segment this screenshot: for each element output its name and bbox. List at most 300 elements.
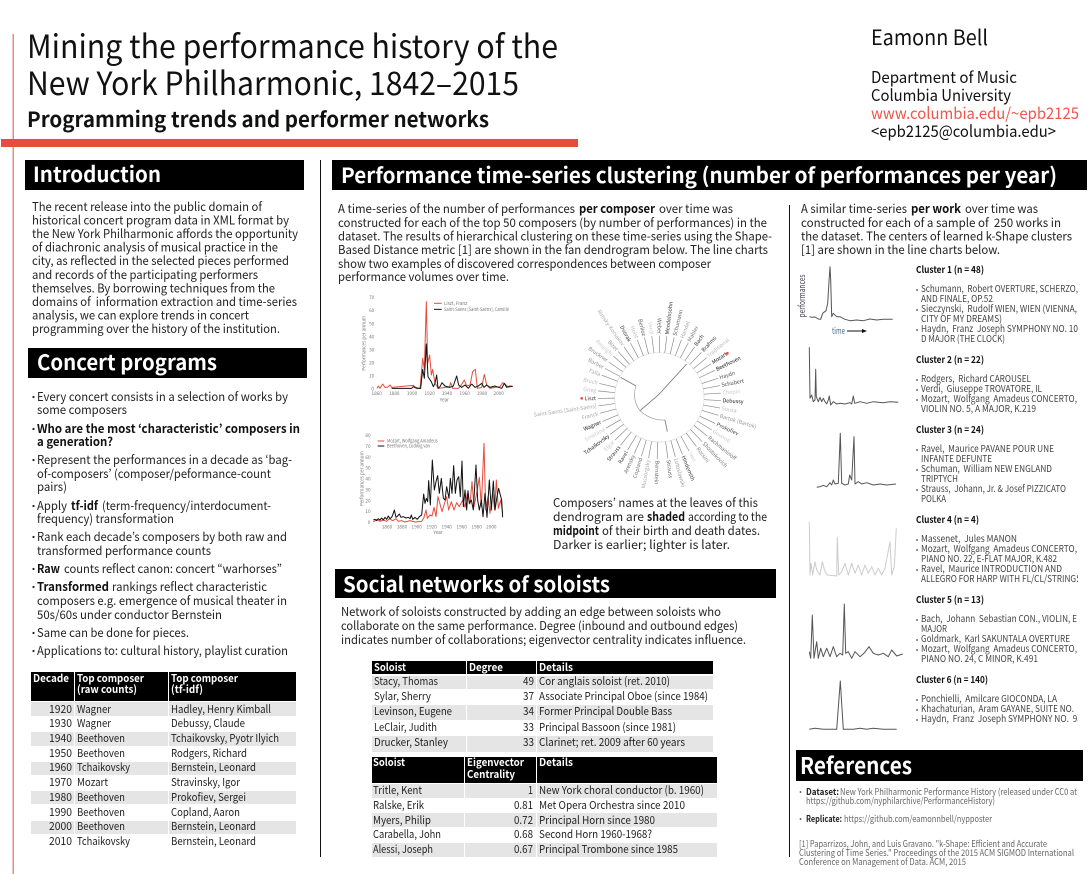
text: replicate: Replicate:: [806, 812, 842, 825]
text: cluster 1 works: Cluster 1 (n = 48): [916, 262, 984, 276]
chart: fan dendrogram of composers: Bizet: [606, 338, 620, 353]
chart: Liszt and Saint-Saens line chart: Performances per annum: [361, 316, 368, 371]
text: concert programs bullets: (term-frequency/interdocument-: [102, 497, 271, 514]
chart: fan dendrogram of composers: Prokofiev: [715, 420, 740, 438]
chart: Liszt and Saint-Saens line chart: [361, 295, 513, 404]
red horizontal rule: [1, 139, 578, 147]
sparkline: cluster 2 centroid: [809, 347, 898, 405]
text: cluster 4 works: Massenet, Jules MANON: [921, 531, 1017, 545]
chart: Liszt and Saint-Saens line chart: 10: [369, 373, 375, 379]
chart: Liszt and Saint-Saens line chart: 20: [369, 360, 375, 366]
title: [27, 22, 558, 105]
table: soloists by degree: 49: [523, 673, 534, 689]
text: concert programs bullets: a generation?: [37, 433, 113, 450]
chart: fan dendrogram of composers: Elgar: [602, 438, 617, 453]
table: top composers by decade: Wagner: [77, 701, 112, 717]
text: per work description: A similar time-series: [801, 200, 907, 217]
table: soloists by eigenvector centrality: Details: [539, 755, 573, 770]
text: cluster 4 works: PIANO NO. 22, E-FLAT MAJOR, K.482: [921, 551, 1057, 565]
author block: Department of Music: [871, 64, 1017, 88]
chart: fan dendrogram of composers: Falla: [588, 366, 602, 378]
red vertical rule: [12, 34, 14, 874]
table: top composers by decade: Decade: [33, 671, 69, 686]
chart: fan dendrogram of composers: Franck: [581, 410, 599, 422]
text: per work description: constructed for each of a sample of 250 works in: [801, 214, 1061, 231]
panel: references: [796, 747, 1083, 868]
chart: Mozart and Beethoven line chart: Year: [432, 530, 443, 536]
text: introduction body: [32, 198, 299, 337]
heading: social networks: [335, 569, 776, 599]
chart: Liszt and Saint-Saens line chart: 40: [369, 334, 375, 340]
text: network description: Network of soloists constructed by adding an edge between soloists who: [341, 603, 721, 620]
text: per work description: over time was: [965, 200, 1038, 217]
text: cluster 3 works: Cluster 3 (n = 24): [916, 422, 984, 436]
text: cluster 5 works: [916, 592, 1077, 665]
table: soloists by degree: Cor anglais soloist (ret. 2010): [539, 673, 670, 689]
text: concert programs bullets: counts reflect canon: concert “warhorses”: [64, 560, 282, 577]
table: soloists by eigenvector centrality: Met Opera Orchestra since 2010: [539, 797, 685, 813]
text: per composer description: A time-series of the number of performances: [338, 200, 575, 217]
axis label: performances: performances: [795, 274, 808, 318]
column divider left: [320, 160, 321, 857]
chart: fan dendrogram of composers: Grieg: [583, 385, 597, 394]
text: per composer description: per composer: [579, 200, 656, 217]
table: top composers by decade: 1990: [49, 804, 72, 820]
table: soloists by eigenvector centrality: Myers, Philip: [373, 812, 431, 828]
text: cluster 2 works: [916, 352, 1077, 415]
chart: fan dendrogram of composers: Traditional: [705, 336, 731, 359]
chart: fan dendrogram of composers: Tchaikovsky: [582, 432, 611, 457]
chart: fan dendrogram of composers: Haydn: [718, 369, 736, 381]
chart: fan dendrogram of composers: Shostakovich: [701, 440, 729, 469]
table: top composers by decade: (raw counts): [77, 682, 137, 697]
chart: fan dendrogram of composers: Berlioz: [636, 318, 648, 337]
chart: Liszt and Saint-Saens line chart: Liszt, Franz: [444, 300, 468, 307]
table: top composers by decade: Debussy, Claude: [171, 715, 245, 731]
text: cluster 4 works: [916, 512, 1081, 585]
table: top composers by decade: Bernstein, Leonard: [171, 759, 256, 775]
text: cluster 2 works: Cluster 2 (n = 22): [916, 352, 984, 366]
text: per composer description: show two examples of discovered correspondences between composer: [338, 255, 711, 272]
chart: Liszt and Saint-Saens line chart: 0: [371, 387, 374, 393]
dendrogram caption: shaded: [647, 508, 685, 525]
table: soloists by degree: Sylar, Sherry: [374, 688, 431, 704]
table: top composers by decade: Beethoven: [77, 730, 125, 746]
table: soloists by degree: Clarinet; ret. 2009 after 60 years: [539, 734, 685, 750]
text: introduction body: historical concert program data in XML format by: [32, 212, 290, 228]
table: top composers by decade: Beethoven: [77, 818, 125, 834]
chart: fan dendrogram of composers: Mendelssohn: [663, 301, 675, 335]
table: top composers by decade: Prokofiev, Sergei: [171, 789, 246, 805]
chart: fan dendrogram of composers: Mahler: [685, 323, 701, 343]
heading: social networks: Social networks of soloists: [343, 569, 610, 599]
text: dataset: [800, 785, 1078, 807]
text: cluster 1 works: CITY OF MY DREAMS): [921, 311, 1002, 325]
chart: fan dendrogram of composers: Debussy: [722, 396, 744, 405]
heading: introduction: Introduction: [33, 159, 161, 189]
chart: fan dendrogram of composers: Mozart: [710, 350, 729, 366]
table: soloists by degree: Soloist: [374, 660, 407, 675]
text: concert programs bullets: 50s/60s under conductor Bernstein: [37, 606, 222, 623]
text: network description: [341, 603, 746, 648]
text: concert programs bullets: frequency) transformation: [37, 510, 174, 527]
chart: fan dendrogram of composers: Smetana: [583, 425, 606, 443]
table: soloists by eigenvector centrality: 0.68: [514, 826, 533, 842]
dendrogram caption: [553, 494, 767, 553]
chart: fan dendrogram of composers: Brahms: [699, 334, 719, 354]
chart: fan dendrogram of composers: Ives: [687, 451, 699, 463]
text: citation: Conference on Management of Data. ACM, 2015: [799, 855, 966, 868]
text: cluster 2 works: Verdi, Giuseppe TROVATORE, IL: [921, 381, 1042, 395]
table: soloists by degree: Levinson, Eugene: [374, 703, 452, 719]
chart: Mozart and Beethoven line chart: 20: [365, 498, 371, 504]
dendrogram caption: dendrogram are: [553, 508, 644, 525]
table: soloists by eigenvector centrality: Soloist: [373, 755, 406, 770]
chart: fan dendrogram of composers: Handel: [678, 319, 692, 340]
text: concert programs bullets: Same can be done for pieces.: [37, 624, 189, 641]
chart: Mozart and Beethoven line chart: 1980: [471, 524, 482, 530]
text: cluster 5 works: Cluster 5 (n = 13): [916, 592, 984, 606]
text: per work description: [801, 200, 1072, 258]
chart: fan dendrogram of composers: Sousa: [721, 404, 737, 415]
text: introduction body: themselves. By borrowing techniques from the: [32, 280, 275, 296]
text: concert programs bullets: rankings reflect characteristic: [112, 578, 267, 595]
chart: fan dendrogram of composers: Dvorak: [618, 324, 633, 343]
chart: fan dendrogram of composers: Strauss: [665, 459, 675, 479]
author block: Columbia University: [871, 82, 1012, 106]
text: network description: collaborate on the same performance. Degree (inbound and outbound edges): [341, 617, 738, 634]
author block: [871, 22, 1079, 142]
table: soloists by degree: LeClair, Judith: [374, 719, 437, 735]
table: soloists by eigenvector centrality: New York choral conductor (b. 1960): [539, 782, 704, 798]
table: top composers by decade: Hadley, Henry Kimball: [171, 701, 271, 717]
chart: Mozart and Beethoven line chart: Mozart, Wolfgang Amadeus: [387, 438, 438, 445]
text: concert programs bullets: Transformed: [37, 578, 109, 595]
table: soloists by degree: 33: [523, 734, 534, 750]
text: concert programs bullets: Represent the performances in a decade as ‘bag-: [37, 451, 292, 468]
text: cluster 6 works: Cluster 6 (n = 140): [916, 672, 988, 686]
table: top composers by decade: 1970: [49, 774, 72, 790]
text: concert programs bullets: [32, 388, 300, 659]
chart: Mozart and Beethoven line chart: 1940: [441, 524, 452, 530]
table: top composers by decade: Beethoven: [77, 789, 125, 805]
text: cluster 4 works: Cluster 4 (n = 4): [916, 512, 979, 526]
chart: Mozart and Beethoven line chart: 40: [365, 477, 371, 483]
table: soloists by eigenvector centrality: 0.72: [514, 812, 533, 828]
chart: Mozart and Beethoven line chart: 2000: [486, 524, 497, 530]
chart: Mozart and Beethoven line chart: 30: [365, 487, 371, 493]
author block: Eamonn Bell: [871, 22, 988, 52]
table: top composers by decade: Tchaikovsky: [77, 833, 130, 849]
panel: cluster 5: [809, 592, 1077, 665]
panel: introduction: [25, 159, 304, 337]
chart: Mozart and Beethoven line chart: 1880: [397, 524, 408, 530]
text: cluster 4 works: Ravel, Maurice INTRODUCTION AND: [921, 561, 1062, 575]
table: soloists by eigenvector centrality: Ralske, Erik: [373, 797, 424, 813]
table: soloists by eigenvector centrality: Carabella, John: [373, 826, 441, 842]
text: dataset: Dataset:: [806, 785, 839, 798]
chart: Mozart and Beethoven line chart: 50: [365, 466, 371, 472]
chart: fan dendrogram of composers: Liszt: [585, 394, 596, 402]
heading: performance time-series clustering: Performance time-series clustering (number of performances per year): [341, 160, 1057, 190]
author block: www.columbia.edu/~epb2125: [871, 100, 1079, 124]
table: top composers by decade: Bernstein, Leonard: [171, 833, 256, 849]
table: soloists by eigenvector centrality: Tritle, Kent: [373, 782, 422, 798]
text: citation: [1] Paparrizos, John, and Luis Gravano. "k-Shape: Efficient and Accurate: [799, 837, 1047, 850]
chart: Liszt and Saint-Saens line chart: 1960: [459, 391, 470, 397]
chart: fan dendrogram of composers: Holst: [629, 325, 641, 340]
text: per composer description: constructed for each of the top 50 composers (by number of performances) in the: [338, 214, 767, 231]
text: concert programs bullets: transformed performance counts: [37, 542, 211, 559]
chart: Liszt and Saint-Saens line chart: 2000: [493, 391, 504, 397]
sparkline: cluster 6 centroid: [809, 681, 897, 729]
dendrogram caption: midpoint: [553, 522, 599, 539]
dendrogram caption: Composers’ names at the leaves of this: [553, 494, 758, 511]
table: top composers by decade: 1930: [49, 715, 72, 731]
chart: fan dendrogram of composers: Schubert: [721, 377, 744, 389]
text: cluster 5 works: PIANO NO. 24, C MINOR, K.491: [921, 651, 1038, 665]
text: cluster 2 works: Rodgers, Richard CAROUSEL: [921, 371, 1031, 385]
panel: cluster 4: [809, 512, 1081, 585]
chart: Mozart and Beethoven line chart: 70: [365, 444, 371, 450]
chart: Liszt and Saint-Saens line chart: Year: [439, 398, 449, 404]
arrow: time: time: [832, 324, 845, 337]
sparkline: cluster 5 centroid: [809, 604, 903, 658]
chart: fan dendrogram of composers: Copland: [631, 457, 644, 479]
table: soloists by degree: 33: [523, 719, 534, 735]
text: cluster 2 works: VIOLIN NO. 5, A MAJOR, K.219: [921, 401, 1036, 415]
text: per composer description: [338, 200, 772, 285]
table: soloists by eigenvector centrality: 1: [528, 782, 533, 798]
text: cluster 3 works: Schuman, William NEW ENGLAND: [921, 461, 1052, 475]
table: soloists by eigenvector centrality: Eigenvector: [467, 755, 524, 770]
table: soloists by degree: Drucker, Stanley: [374, 734, 448, 750]
chart: fan dendrogram of composers: Verdi: [646, 321, 656, 335]
chart: fan dendrogram of composers: Bruch: [582, 376, 599, 387]
chart: fan dendrogram of composers: Schumann: [670, 309, 685, 337]
text: concert programs bullets: tf-idf: [71, 497, 98, 514]
chart: Liszt and Saint-Saens line chart: 30: [369, 347, 375, 353]
table: top composers by decade: 2010: [49, 833, 72, 849]
chart: fan dendrogram of composers: Beethoven: [714, 354, 742, 373]
title: Mining the performance history of the: [27, 22, 558, 68]
chart: Mozart and Beethoven line chart: 10: [365, 509, 371, 515]
chart: Mozart and Beethoven line chart: 80: [365, 433, 371, 439]
chart: Mozart and Beethoven line chart: 1960: [456, 524, 467, 530]
chart: fan dendrogram of composers: Bernstein: [653, 460, 661, 485]
chart: fan dendrogram of composers: Rossini: [695, 445, 712, 465]
text: cluster 3 works: INFANTE DEFUNTE: [921, 451, 992, 465]
table: soloists by eigenvector centrality: Alessi, Joseph: [373, 841, 433, 857]
table: soloists by eigenvector centrality: 0.81: [514, 797, 533, 813]
table: soloists by degree: Associate Principal Oboe (since 1984): [539, 688, 708, 704]
panel: social networks of soloists: [335, 569, 776, 857]
table: top composers by decade: [31, 671, 296, 849]
text: per work description: the dataset. The centers of learned k-Shape clusters: [801, 228, 1072, 244]
table: soloists by eigenvector centrality: Principal Trombone since 1985: [539, 841, 678, 857]
sparkline: cluster 1 centroid: [809, 267, 893, 321]
chart: Liszt and Saint-Saens line chart: 1920: [424, 391, 435, 397]
panel: cluster 3: [817, 422, 1066, 505]
table: top composers by decade: 2000: [49, 818, 72, 834]
panel: cluster 1: [795, 262, 1078, 345]
table: top composers by decade: Beethoven: [77, 804, 125, 820]
chart: Mozart and Beethoven line chart: 60: [365, 455, 371, 461]
chart: Liszt and Saint-Saens line chart: 50: [369, 321, 375, 327]
text: concert programs bullets: of-composers’ (composer/peformance-count: [37, 465, 271, 482]
text: cluster 5 works: MAJOR: [921, 621, 947, 635]
table: top composers by decade: Rodgers, Richard: [171, 745, 247, 761]
chart: Liszt and Saint-Saens line chart: 1900: [407, 391, 418, 397]
text: cluster 1 works: AND FINALE, OP.52: [921, 291, 993, 305]
text: concert programs bullets: Raw: [37, 560, 60, 577]
chart: fan dendrogram of composers: Lutoslawski: [672, 457, 688, 488]
chart: Mozart and Beethoven line chart: 1920: [426, 524, 437, 530]
chart: fan dendrogram of composers: Weber: [656, 318, 664, 335]
table: top composers by decade: (tf-idf): [171, 682, 203, 697]
text: concert programs bullets: Applications to: cultural history, playlist curation: [37, 642, 288, 659]
heading: concert programs: Concert programs: [37, 347, 217, 377]
sparkline: cluster 3 centroid: [817, 433, 896, 487]
table: top composers by decade: Wagner: [77, 715, 112, 731]
text: cluster 1 works: D MAJOR (THE CLOCK): [921, 331, 1005, 345]
text: per composer description: over time was: [659, 200, 733, 217]
chart: Mozart and Beethoven line chart: 1900: [411, 524, 422, 530]
text: concert programs bullets: some composers: [37, 401, 127, 418]
table: soloists by degree: Principal Bassoon (since 1981): [539, 719, 676, 735]
chart: fan dendrogram of composers: Bartok (Bartok): [719, 412, 758, 431]
table: top composers by decade: Copland, Aaron: [171, 804, 240, 820]
text: per composer description: performance volumes over time.: [338, 268, 509, 285]
panel: cluster 2: [809, 347, 1077, 415]
text: per composer description: dataset. The results of hierarchical clustering on these time-series using the Shape-: [338, 228, 772, 244]
text: cluster 3 works: POLKA: [921, 491, 946, 505]
chart: Liszt and Saint-Saens line chart: 1940: [442, 391, 453, 397]
table: soloists by eigenvector centrality: Centrality: [467, 767, 515, 782]
text: cluster 3 works: Ravel, Maurice PAVANE POUR UNE: [921, 441, 1054, 455]
table: soloists by eigenvector centrality: Second Horn 1960-1968?: [539, 826, 652, 842]
text: introduction body: programming over the history of the institution.: [32, 320, 280, 337]
table: top composers by decade: 1950: [49, 745, 72, 761]
chart: Mozart and Beethoven line chart: 0: [368, 520, 371, 526]
chart: fan dendrogram of composers: Bach: [692, 333, 706, 348]
sparkline: cluster 4 centroid: [809, 522, 896, 576]
arrow: time: [832, 324, 867, 337]
chart: fan dendrogram of composers: [533, 301, 758, 489]
subtitle: Programming trends and performer networks: [27, 104, 489, 134]
heading: references: [796, 747, 1083, 781]
chart: fan dendrogram of composers: Wagner: [582, 418, 603, 433]
text: cluster 3 works: Strauss, Johann, Jr. & Josef PIZZICATO: [921, 481, 1066, 495]
table: top composers by decade: Top composer: [171, 671, 238, 686]
chart: Mozart and Beethoven line chart: Performances per annum: [358, 451, 365, 506]
chart: fan dendrogram of composers: Gounod: [711, 427, 732, 445]
chart: fan dendrogram of composers: Barber: [587, 356, 606, 371]
chart: fan dendrogram of composers: Strauss: [605, 443, 623, 463]
text: introduction body: city, as reflected in the selected pieces performed: [32, 252, 289, 269]
dendrogram caption: Darker is earlier; lighter is later.: [553, 536, 730, 553]
chart: fan dendrogram of composers: Rachmaninoff: [706, 434, 739, 462]
chart: Mozart and Beethoven line chart: Beethoven, Ludwig van: [387, 443, 430, 450]
table: soloists by degree: [372, 660, 713, 752]
author block: <epb2125@columbia.edu>: [871, 118, 1056, 142]
text: concert programs bullets: Every concert consists in a selection of works by: [37, 388, 289, 405]
table: soloists by eigenvector centrality: 0.67: [514, 841, 533, 857]
table: soloists by degree: 37: [523, 688, 534, 704]
text: citation: [799, 837, 1074, 868]
text: introduction body: of diachronic analysis of musical practice in the: [32, 238, 278, 256]
chart: fan dendrogram of composers: Ravel: [616, 449, 630, 465]
table: soloists by degree: Degree: [469, 660, 503, 675]
heading: concert programs: [28, 347, 307, 378]
panel: cluster 6: [809, 672, 1082, 729]
chart: fan dendrogram of composers: Saint-Saens [Saint-Saëns]: [533, 402, 597, 419]
text: per work description: per work: [911, 200, 962, 217]
text: introduction body: the New York Philharmonic affords the opportunity: [32, 225, 299, 242]
chart: fan dendrogram of composers: Mussorgsky: [639, 459, 652, 489]
text: network description: indicates number of collaborations; eigenvector centrality indicates influence.: [341, 631, 746, 648]
chart: Liszt and Saint-Saens line chart: 70: [369, 295, 375, 301]
dendrogram caption: of their birth and death dates.: [602, 522, 760, 539]
heading: introduction: [25, 159, 304, 190]
text: cluster 3 works: TRIPTYCH: [921, 471, 958, 485]
text: per composer description: Based Distance metric [1] are shown in the fan dendrogram below. The line charts: [338, 241, 768, 258]
chart: Liszt and Saint-Saens line chart: 60: [369, 308, 375, 314]
text: concert programs bullets: Apply: [37, 497, 68, 514]
dendrogram caption: according to the: [688, 508, 767, 525]
chart: fan dendrogram of composers: Arensky: [622, 453, 637, 475]
chart: fan dendrogram of composers: Respighi: [594, 338, 616, 358]
text: concert programs bullets: Rank each decade’s composers by both raw and: [37, 528, 287, 545]
text: introduction body: domains of information extraction and time-series: [32, 293, 297, 310]
table: soloists by eigenvector centrality: Principal Horn since 1980: [539, 812, 655, 828]
table: top composers by decade: 1960: [49, 759, 72, 775]
text: replicate: [800, 812, 992, 825]
table: top composers by decade: Top composer: [77, 671, 144, 686]
text: per work description: [1] are shown in the line charts below.: [801, 241, 1000, 258]
table: soloists by degree: Details: [539, 660, 573, 675]
text: concert programs bullets: pairs): [37, 478, 67, 495]
title: New York Philharmonic, 1842–2015: [27, 59, 519, 105]
chart: Liszt and Saint-Saens line chart: 1880: [389, 391, 400, 397]
text: concert programs bullets: composers e.g. emergence of musical theater in: [37, 592, 287, 609]
chart: fan dendrogram of composers: Bruckner: [587, 344, 611, 365]
table: top composers by decade: 1920: [49, 701, 72, 717]
chart: fan dendrogram of composers: Chopin: [722, 387, 741, 397]
text: introduction body: The recent release into the public domain of: [32, 198, 263, 215]
table: top composers by decade: Stravinsky, Igor: [171, 774, 241, 790]
table: top composers by decade: 1940: [49, 730, 72, 746]
table: soloists by degree: Stacy, Thomas: [374, 673, 438, 689]
text: replicate: https://github.com/eamonnbell/nypposter: [844, 812, 992, 825]
chart: Liszt and Saint-Saens line chart: Saint-Saens [Saint-Saëns], Camille: [444, 306, 509, 313]
text: introduction body: analysis, we can explore trends in concert: [32, 306, 249, 324]
table: top composers by decade: Bernstein, Leonard: [171, 818, 256, 834]
chart: Mozart and Beethoven line chart: [358, 433, 503, 536]
table: soloists by degree: Former Principal Double Bass: [539, 703, 672, 719]
column divider right: [789, 205, 790, 857]
table: top composers by decade: Beethoven: [77, 745, 125, 761]
table: soloists by eigenvector centrality: [372, 755, 717, 857]
text: cluster 5 works: Goldmark, Karl SAKUNTALA OVERTURE: [921, 631, 1070, 645]
table: top composers by decade: Tchaikovsky: [77, 759, 130, 775]
text: dataset: https://github.com/nyphilarchive/PerformanceHistory): [806, 794, 995, 807]
heading: references: References: [800, 747, 912, 781]
table: top composers by decade: Tchaikovsky, Pyotr Ilyich: [171, 730, 279, 746]
text: cluster 1 works: [916, 262, 1078, 345]
text: concert programs bullets: Who are the most ‘characteristic’ composers in: [37, 420, 300, 437]
chart: Liszt and Saint-Saens line chart: 1860: [371, 391, 382, 397]
